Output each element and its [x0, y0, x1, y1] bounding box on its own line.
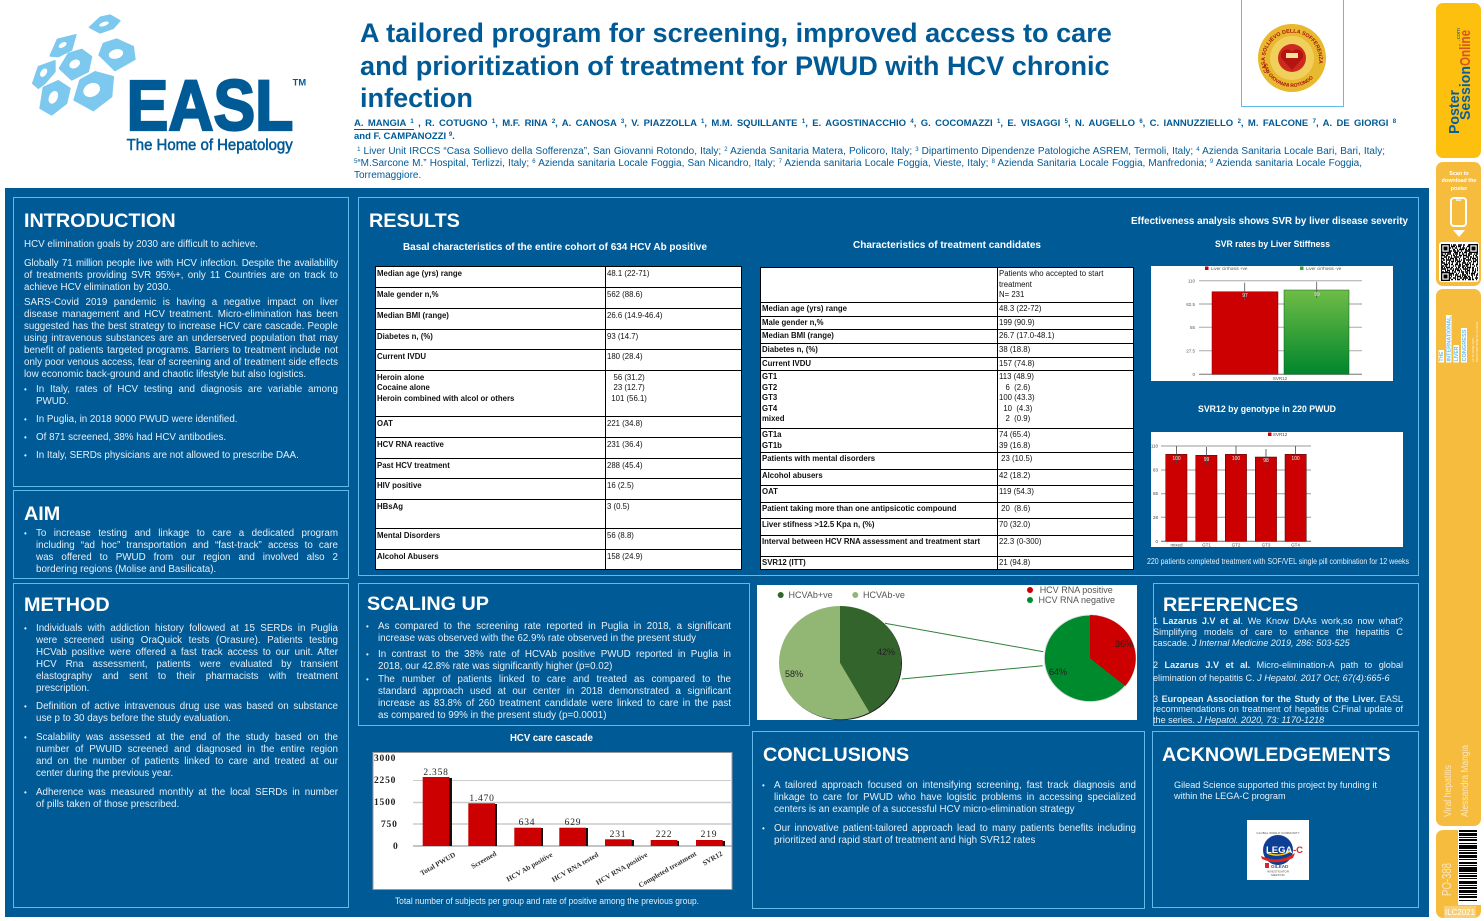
bullet: individuals — [36, 623, 338, 695]
table: treatment candidates: Median age (yrs) range — [762, 304, 847, 313]
text: global situation: achieve HCV elimination by 2030. — [24, 282, 171, 292]
caption: cascade: Total number of subjects per group and rate of positive among the previous group. — [395, 896, 699, 906]
chart: SVR12 by genotype: 100 — [1232, 456, 1240, 462]
chart: SVR12 by genotype — [1151, 432, 1403, 548]
chart heading: HCV care cascade: HCV care cascade — [510, 733, 593, 744]
text: covid impact: SARS-Covid 2019 pandemic is having a negative impact on liver — [24, 296, 338, 308]
reference 1: 1 Lazarus J.V et al. We Know DAAs work,so now what? — [1153, 616, 1403, 626]
connector lines — [885, 623, 1043, 679]
bullet: individuals: elastography and sent to their pharmacists with treatment — [36, 671, 338, 682]
text: aim — [36, 528, 338, 576]
pie: RNA: 64% — [1049, 667, 1067, 677]
table: basal characteristics — [375, 266, 742, 570]
bullet: innovative approach — [774, 823, 1136, 847]
sidebar: PosterSessionOnline: Online — [1457, 30, 1474, 66]
table: basal characteristics: 288 (45.4) — [607, 460, 643, 470]
chart: SVR12 by genotype: mixed — [1170, 542, 1183, 548]
text: acknowledgement: within the LEGA-C program — [1174, 790, 1286, 800]
table: treatment candidates: SVR12 (ITT) — [762, 558, 806, 567]
bullet: linked to care — [378, 674, 731, 722]
bullet: innovative approach: prioritized and rapid start of treatment and high SVR12 rates — [774, 835, 1035, 846]
QR code — [1439, 242, 1479, 282]
bullet: screening rate — [378, 621, 731, 645]
legend: RNA pie: HCV RNA positive — [1040, 585, 1113, 595]
chart: HCV care cascade: Total PWUD — [419, 851, 457, 877]
text: acknowledgement — [1174, 780, 1377, 801]
table: basal characteristics: Median BMI (range) — [377, 310, 449, 320]
table: treatment candidates: 38 (18.8) — [999, 345, 1030, 354]
chart: HCV care cascade: HCV RNA positive — [595, 851, 649, 887]
panel: method — [13, 583, 349, 908]
bullet: screening rate: increase was observed with the 62.9% rate observed in the present study — [378, 633, 696, 644]
heading: aim: AIM — [24, 503, 60, 525]
table: treatment candidates: Median BMI (range) — [762, 331, 834, 340]
logo: Casa Sollievo della Sofferenza: CASA SOLLIEVO DELLA SOFFERENZA — [1261, 28, 1323, 73]
table: basal characteristics: Male gender n,% — [377, 290, 439, 298]
caption: SOF/VEL: 220 patients completed treatment with SOF/VEL single pill combination for 12 weeks — [1147, 557, 1409, 566]
table: treatment candidates: GT1 — [762, 372, 777, 381]
chart: HCV care cascade: 231 — [610, 830, 626, 840]
chart: HCV care cascade: 0 — [393, 842, 399, 852]
chart: HCV care cascade: 2.358 — [423, 768, 449, 778]
reference 2: 2 Lazarus J.V et al. Micro-elimination-A path to global — [1153, 660, 1403, 670]
table: treatment candidates: Patient taking more than one antipsicotic compound — [762, 504, 957, 513]
table: treatment candidates: Patients with mental disorders — [762, 454, 875, 463]
text: session: Viral hepatitis — [1442, 765, 1454, 817]
congress logo: REGISTER NOW AT ILC2021 — [1475, 321, 1479, 362]
chart: HCV care cascade: 2250 — [374, 776, 396, 786]
sidebar: scan to download: download the — [1442, 178, 1476, 184]
table: treatment candidates: 119 (54.3) — [999, 487, 1034, 496]
bullet: adherence — [36, 786, 338, 810]
pie: RNA — [1044, 615, 1136, 702]
table: basal characteristics: Heroin alone — [377, 372, 424, 382]
congress logo: LIVER — [1454, 346, 1460, 362]
table: basal characteristics: 158 (24.9) — [607, 552, 643, 560]
title: infection — [360, 82, 473, 113]
table: basal characteristics: 562 (88.6) — [607, 290, 643, 298]
authors — [354, 118, 1396, 142]
bullet: linked to care: standard approach used at our center in 2018 demonstrated a significant — [378, 686, 731, 697]
table: basal characteristics: Cocaine alone — [377, 383, 430, 392]
bullet: adherence: Adherence was measured monthly at the local SERDs in number — [36, 786, 338, 798]
bullet: scalability: center during the previous year. — [36, 768, 173, 779]
table: basal characteristics: 180 (28.4) — [607, 352, 643, 360]
affiliations: 1 Liver Unit IRCCS “Casa Sollievo della Sofferenza”, San Giovanni Rotondo, Italy; 2 Azienda Sanitaria Matera, Policoro, Italy; 3 Dipartimento Dipendenze Patologiche ASREM, Termoli, Italy; 4 Azienda Sanitaria Locale Bari, Bari, Italy; — [357, 146, 1385, 157]
panel: introduction — [13, 197, 349, 487]
subtitle: effectiveness: Effectiveness analysis shows SVR by liver disease severity — [1131, 216, 1408, 227]
bullet: screened: Of 871 screened, 38% had HCV antibodies. — [36, 432, 226, 443]
table: basal characteristics: HBsAg — [377, 502, 403, 510]
text: global situation — [24, 258, 338, 292]
heading: scaling up: SCALING UP — [367, 593, 489, 615]
sidebar: scan to download — [1436, 162, 1481, 286]
chart: HCV care cascade: 1500 — [374, 798, 396, 808]
bullet: individuals: Individuals with addiction history followed at 15 SERDs in Puglia — [36, 623, 338, 634]
chart: HCV care cascade: 3000 — [374, 754, 396, 764]
bullet: definition: Definition of active intravenous drug use was based on substance — [36, 701, 338, 712]
bullet: tailored approach: A tailored approach focused on intensifying screening, fast track diagnosis and — [774, 780, 1136, 791]
logo: LEGA-C: GLOBAL WORLD COMMUNITY — [1256, 831, 1300, 835]
table: treatment candidates: Current IVDU — [762, 359, 811, 368]
bullet: Italy testing: In Italy, rates of HCV testing and diagnosis are variable among — [36, 384, 338, 395]
table: treatment candidates: Male gender n,% — [762, 318, 824, 327]
affiliations: Torremaggiore. — [354, 170, 421, 181]
reference 3: the series. J Hepatol. 2020, 73: 1170-1218 — [1153, 715, 1324, 725]
icon: phone — [1451, 198, 1466, 226]
table: basal characteristics: Mental Disorders — [377, 530, 440, 540]
table: basal characteristics: Past HCV treatment — [377, 460, 450, 470]
chart: SVR12 by genotype: GT1 — [1202, 542, 1211, 548]
authors: and F. CAMPANOZZI 9. — [354, 130, 455, 142]
pie: RNA: 36% — [1115, 639, 1133, 649]
bullet: tailored approach — [774, 780, 1136, 816]
logo: EASL — [32, 14, 306, 154]
table: treatment candidates: GT2 — [762, 383, 777, 392]
table: basal characteristics: 48.1 (22-71) — [607, 268, 649, 278]
subtitle: SVR stiffness: SVR rates by Liver Stiffness — [1215, 239, 1330, 250]
table: treatment candidates: 70 (32.0) — [999, 520, 1030, 529]
panel: conclusions — [752, 731, 1145, 909]
panel: aim — [13, 490, 349, 579]
logo: LEGA-C — [1247, 820, 1309, 880]
sidebar: scan to download: Scan to — [1449, 171, 1469, 177]
table: treatment candidates: Interval between HCV RNA assessment and treatment start — [762, 537, 980, 546]
text: aim: To increase testing and linkage to care a dedicated program — [36, 528, 338, 539]
reference 2 — [1153, 660, 1403, 683]
chart: SVR rates by liver stiffness: SVR12 — [1273, 376, 1288, 381]
table: treatment candidates: Liver stifness >12.5 Kpa n, (%) — [762, 520, 874, 529]
text: covid impact: benefit of patients targeted programs. Barriers to treatment include not — [24, 344, 338, 356]
reference 2: elimination of hepatitis C. J Hepatol. 2017 Oct; 67(4):665-6 — [1153, 672, 1390, 682]
text: covid impact: using intravenous substances are an underserved population that may — [24, 332, 338, 344]
table: treatment candidates: Diabetes n, (%) — [762, 345, 818, 354]
chart: HCV care cascade: 1.470 — [469, 794, 495, 804]
table: treatment candidates — [760, 267, 1134, 570]
text: elimination goals: HCV elimination goals by 2030 are difficult to achieve. — [24, 238, 258, 250]
heading: method: METHOD — [24, 594, 110, 616]
affiliations — [354, 146, 1385, 181]
table: treatment candidates: GT3 — [762, 393, 777, 402]
bullet: individuals: HCV Rna assessment, patients were evaluated by transient — [36, 659, 338, 670]
bullet: HCVAb rate: 2018, our 42.8% rate was significantly higher (p=0.02) — [378, 660, 612, 672]
table: treatment candidates: 100 (43.3) — [999, 393, 1035, 402]
chart: SVR rates by liver stiffness: 82.5 — [1186, 302, 1195, 307]
text: acknowledgement: Gilead Science supported this project by funding it — [1174, 780, 1377, 790]
chart: SVR12 by genotype: GT2 — [1232, 542, 1241, 548]
text: aim: was offered to PWUD from our region and involved also 2 — [36, 552, 338, 563]
heading: results: RESULTS — [369, 210, 460, 232]
bullet: scalability: Scalability was assessed at the end of the study based on the — [36, 732, 338, 743]
table: treatment candidates: 21 (94.8) — [999, 558, 1030, 567]
subtitle: treatment candidates: Characteristics of treatment candidates — [853, 240, 1041, 251]
chart: SVR rates by liver stiffness — [1151, 266, 1393, 381]
text: covid impact: low economic back-ground and chaotic lifestyle but also logistics. — [24, 368, 306, 380]
table: basal characteristics: 56 (8.8) — [607, 530, 634, 540]
bullet: Puglia: In Puglia, in 2018 9000 PWUD were identified. — [36, 414, 238, 425]
chart: SVR rates by liver stiffness: 97 — [1242, 293, 1248, 299]
chart: pie charts — [757, 585, 1137, 720]
table: treatment candidates: N= 231 — [999, 290, 1024, 299]
chart: SVR12 by genotype: 83 — [1153, 468, 1158, 472]
bullet: Italy testing — [36, 384, 338, 408]
chart: SVR rates by liver stiffness: 0 — [1192, 372, 1195, 377]
chart: SVR rates by liver stiffness: 27.5 — [1186, 348, 1195, 354]
chart: SVR12 by genotype: 0 — [1155, 539, 1158, 544]
chart: SVR12 by genotype: SVR12 — [1273, 432, 1288, 437]
chart: SVR12 by genotype: 100 — [1172, 456, 1181, 462]
congress logo: INTERNATIONAL — [1446, 316, 1452, 362]
table: treatment candidates: 10 (4.3) — [1003, 404, 1032, 413]
bullet: individuals: HCVab positive were offered a fast track access to our unit. After — [36, 647, 338, 658]
affiliations: 5“M.Sarcone M.” Hospital, Terlizzi, Italy; 6 Azienda sanitaria Locale Foggia, San Nicandro, Italy; 7 Azienda sanitaria Locale Foggia, Vieste, Italy; 8 Azienda Sanitaria Locale Foggia, Manfredonia; 9 Azienda sanitaria Locale Foggia, — [354, 158, 1362, 169]
bullet: adherence: of pills taken of those prescribed. — [36, 798, 179, 810]
pie: antibody: 42% — [877, 647, 895, 657]
barcode — [1459, 830, 1477, 901]
chart: HCV care cascade: 222 — [656, 830, 672, 840]
pie: antibody: 58% — [785, 669, 803, 679]
logo: LEGA-C: GILEAD — [1271, 864, 1289, 869]
sidebar: congress and topic — [1436, 289, 1481, 826]
chart: HCV care cascade: 750 — [381, 820, 398, 830]
table: basal characteristics: Alcohol Abusers — [377, 552, 439, 560]
text: presenter: Alessandra Mangia — [1459, 745, 1471, 817]
authors: A. MANGIA 1 , R. COTUGNO 1, M.F. RINA 2, A. CANOSA 3, V. PIAZZOLLA 1, M.M. SQUILLANTE 1, E. AGOSTINACCHIO 4, G. COCOMAZZI 1, E. VISAGGI 5, N. AUGELLO 6, C. IANNUZZIELLO 2, M. FALCONE 7, A. DE GIORGI 8 — [354, 118, 1396, 129]
chart: HCV care cascade: HCV Ab positive — [505, 851, 554, 884]
text: covid impact: disease management and HCV treatment. Micro-elimination has been — [24, 308, 338, 320]
bullet: HCVAb rate — [378, 648, 731, 672]
table: treatment candidates: 157 (74.8) — [999, 359, 1035, 368]
bullet: definition: use p to 30 days before the study evaluation. — [36, 713, 231, 724]
text: covid impact — [24, 296, 338, 380]
table: treatment candidates: GT4 — [762, 404, 777, 413]
sidebar: PosterSessionOnline: .com — [1456, 28, 1462, 41]
text: aim: including “ad hoc” transportation and “fast-track” access to care — [36, 540, 338, 551]
heading: references: REFERENCES — [1163, 594, 1298, 616]
reference 3 — [1153, 694, 1404, 725]
chart: SVR12 by genotype: 100 — [1291, 456, 1300, 462]
background panel — [5, 188, 1429, 917]
table: basal characteristics: Diabetes n, (%) — [377, 332, 433, 340]
table: treatment candidates: Patients who accepted to start treatment — [999, 269, 1103, 289]
reference 1: cascade. J Internal Medicine 2019, 286: 503-525 — [1153, 638, 1350, 648]
table: basal characteristics: HIV positive — [377, 480, 422, 490]
title — [360, 17, 1112, 113]
chart: SVR12 by genotype: 98 — [1263, 458, 1269, 464]
bullet: tailored approach: linkage to care for PWUD who have logistic problems in accessing specialized — [774, 792, 1136, 803]
legend: antibody pie — [778, 590, 905, 600]
text: global situation: of treatments providing SVR 95%+, only 11 Countries are on track to — [24, 270, 338, 280]
table: basal characteristics: 56 (31.2) — [613, 372, 645, 382]
table: treatment candidates: 48.3 (22-72) — [999, 304, 1041, 313]
text: covid impact: suggested has the best strategy to increase HCV care cascade. People — [24, 320, 338, 332]
reference 1: Simplifying models of care to enhance the hepatitis C — [1153, 627, 1403, 637]
reference 3: recommendations on treatment of hepatitis C:Final update of — [1153, 704, 1403, 714]
sidebar: PosterSessionOnline — [1436, 3, 1481, 158]
logo: LEGA-C: MEETING — [1271, 873, 1285, 877]
table: basal characteristics: 16 (2.5) — [607, 480, 634, 490]
chart: SVR12 by genotype: 55 — [1153, 491, 1158, 496]
chart: SVR12 by genotype: 99 — [1204, 457, 1209, 463]
text: global situation: Globally 71 million people live with HCV infection. Despite the availability — [24, 258, 338, 268]
table: treatment candidates: mixed — [762, 414, 785, 423]
reference 1 — [1153, 616, 1403, 648]
table: treatment candidates: 23 (10.5) — [1001, 454, 1032, 463]
table: basal characteristics: 23 (12.7) — [613, 383, 645, 392]
logo: LEGA-C: LEGA — [1266, 845, 1293, 856]
logo: LEGA-C: INVESTIGATOR — [1267, 870, 1290, 874]
chart: SVR rates by liver stiffness: 110 — [1188, 278, 1195, 284]
bullet: linked to care: The number of patients linked to care and treated as compared to the — [378, 674, 731, 685]
chart: HCV care cascade: 219 — [701, 830, 717, 840]
sidebar: scan to download: poster — [1451, 186, 1468, 192]
chart: HCV care cascade: Completed treatment — [637, 850, 699, 890]
chart: SVR rates by liver stiffness: Liver cirrhosis +ve — [1211, 266, 1248, 271]
text: PO number: PO-388 — [1440, 863, 1454, 896]
congress logo: THE — [1439, 351, 1445, 362]
bullet: linked to care: increase as 83.8% of 260 treatment candidate were linked to care in the past — [378, 698, 731, 709]
bullet: scalability — [36, 732, 338, 780]
logo: Casa Sollievo della Sofferenza: SAN GIOVANNI ROTONDO — [1264, 64, 1312, 87]
bullet: innovative approach: Our innovative patient-tailored approach lead to many patients benefits including — [774, 823, 1136, 834]
table: treatment candidates: 74 (65.4) — [999, 430, 1030, 439]
table: treatment candidates: 22.3 (0-300) — [999, 537, 1041, 546]
subtitle: SVR genotype: SVR12 by genotype in 220 PWUD — [1198, 404, 1336, 415]
heading: conclusions: CONCLUSIONS — [763, 744, 909, 766]
bullet: linked to care: as compared to 99% in the present study (p=0.0001) — [378, 710, 606, 721]
chart: SVR12 by genotype: GT4 — [1291, 542, 1300, 548]
table: basal characteristics: 3 (0.5) — [607, 502, 630, 510]
bullet: Italy testing: PWUD. — [36, 396, 69, 407]
chart: SVR rates by liver stiffness: 55 — [1190, 325, 1195, 330]
table: basal characteristics: OAT — [377, 418, 393, 428]
logo: EASL: The Home of Hepatology — [127, 137, 293, 154]
table: basal characteristics: Heroin combined with alcol or others — [377, 394, 514, 403]
panel: references — [1153, 583, 1419, 726]
subtitle: basal characteristics: Basal characteristics of the entire cohort of 634 HCV Ab positive — [403, 242, 707, 253]
table: treatment candidates: OAT — [762, 487, 778, 496]
table: basal characteristics: 101 (56.1) — [611, 394, 647, 403]
table: treatment candidates: 26.7 (17.0-48.1) — [999, 331, 1054, 340]
title: A tailored program for screening, improved access to care — [360, 17, 1112, 48]
chart: SVR12 by genotype: 110 — [1151, 444, 1158, 448]
table: basal characteristics: 231 (36.4) — [607, 440, 643, 448]
chart: HCV care cascade: 629 — [565, 818, 581, 828]
text: aim: bordering regions (Molise and Basilicata). — [36, 564, 216, 575]
congress logo: 12-16 JUNE 2021 — [1471, 338, 1475, 362]
chart: HCV care cascade: 634 — [519, 818, 535, 828]
text: covid impact: only poor venous access, fear of screening and of treatment side effects — [24, 356, 338, 368]
reference 3: 3 European Association for the Study of the Liver. EASL — [1153, 694, 1403, 704]
congress logo: CONGRESS — [1462, 329, 1468, 362]
logo: EASL: EASL — [127, 67, 293, 146]
chart: HCV care cascade — [372, 752, 732, 890]
bullet: individuals: were screened using OraQuick tests (Orasure). Patients testing — [36, 635, 338, 646]
text: ILC2021: ILC2021 — [1445, 908, 1476, 917]
bullet: scalability: and on the number of patients linked to care and treated at our — [36, 756, 338, 767]
legend: RNA pie: HCV RNA negative — [1038, 595, 1115, 605]
table: treatment candidates: 113 (48.9) — [999, 372, 1034, 381]
chart: HCV care cascade: HCV RNA tested — [550, 851, 600, 884]
table: treatment candidates: GT1b — [762, 441, 782, 450]
table: treatment candidates: 39 (16.8) — [999, 441, 1030, 450]
congress logo — [1438, 315, 1479, 362]
table: treatment candidates: GT1a — [762, 430, 782, 439]
bullet: individuals: prescription. — [36, 683, 89, 694]
table: basal characteristics: HCV RNA reactive — [377, 440, 444, 448]
chart: SVR rates by liver stiffness: Liver cirrhosis -ve — [1306, 266, 1342, 271]
chart: SVR rates by liver stiffness: 99 — [1314, 292, 1320, 298]
table: treatment candidates: 20 (8.6) — [1001, 504, 1030, 513]
table: basal characteristics: 93 (14.7) — [607, 332, 638, 340]
table: treatment candidates: 2 (0.9) — [1005, 414, 1030, 423]
legend: antibody pie: HCVAb-ve — [863, 590, 905, 600]
table: treatment candidates: Alcohol abusers — [762, 471, 823, 480]
title: and prioritization of treatment for PWUD with HCV chronic — [360, 50, 1110, 80]
table: basal characteristics: 221 (34.8) — [607, 418, 643, 428]
panel: acknowledgements — [1152, 731, 1419, 908]
chart: HCV care cascade: SVR12 — [701, 850, 724, 868]
table: basal characteristics: Median age (yrs) range — [377, 268, 462, 278]
logo: LEGA-C: -C — [1293, 845, 1303, 856]
icon: arrow down — [1453, 230, 1465, 237]
chart: HCV care cascade: Screened — [470, 850, 498, 871]
panel: scaling up — [358, 583, 750, 726]
table: treatment candidates: 199 (90.9) — [999, 318, 1035, 327]
table: treatment candidates: 42 (18.2) — [999, 471, 1030, 480]
table: basal characteristics: 26.6 (14.9-46.4) — [607, 310, 662, 320]
table: basal characteristics: Current IVDU — [377, 352, 426, 360]
bullet: screening rate: As compared to the screening rate reported in Puglia in 2018, a significant — [378, 621, 731, 632]
sidebar: poster number and barcode — [1436, 830, 1481, 918]
bullet: tailored approach: centers is an example of a successful HCV micro-elimination strategy — [774, 804, 1075, 815]
bullet: HCVAb rate: In contrast to the 38% rate of HCVAb positive PWUD reported in Puglia in — [378, 648, 731, 660]
bullet: scalability: number of PWUID screened and diagnosed in the entire region — [36, 744, 338, 755]
heading: introduction: INTRODUCTION — [24, 210, 176, 232]
legend: RNA pie — [1027, 585, 1115, 605]
chart: SVR12 by genotype: 28 — [1153, 515, 1158, 520]
pie: antibody — [779, 606, 902, 720]
bullet: SERDs: In Italy, SERDs physicians are not allowed to prescribe DAA. — [36, 450, 299, 461]
logo: EASL: TM — [293, 77, 306, 87]
panel: results — [358, 197, 1419, 576]
sidebar: PosterSessionOnline: Session — [1457, 66, 1474, 120]
sidebar: PosterSessionOnline: Poster — [1446, 90, 1463, 134]
bullet: definition — [36, 701, 338, 725]
chart: SVR12 by genotype: GT3 — [1262, 542, 1271, 548]
logo: Casa Sollievo della Sofferenza — [1241, 0, 1344, 107]
legend: antibody pie: HCVAb+ve — [788, 590, 833, 600]
heading: acknowledgements: ACKNOWLEDGEMENTS — [1162, 744, 1391, 766]
table: treatment candidates: 6 (2.6) — [1005, 383, 1030, 392]
